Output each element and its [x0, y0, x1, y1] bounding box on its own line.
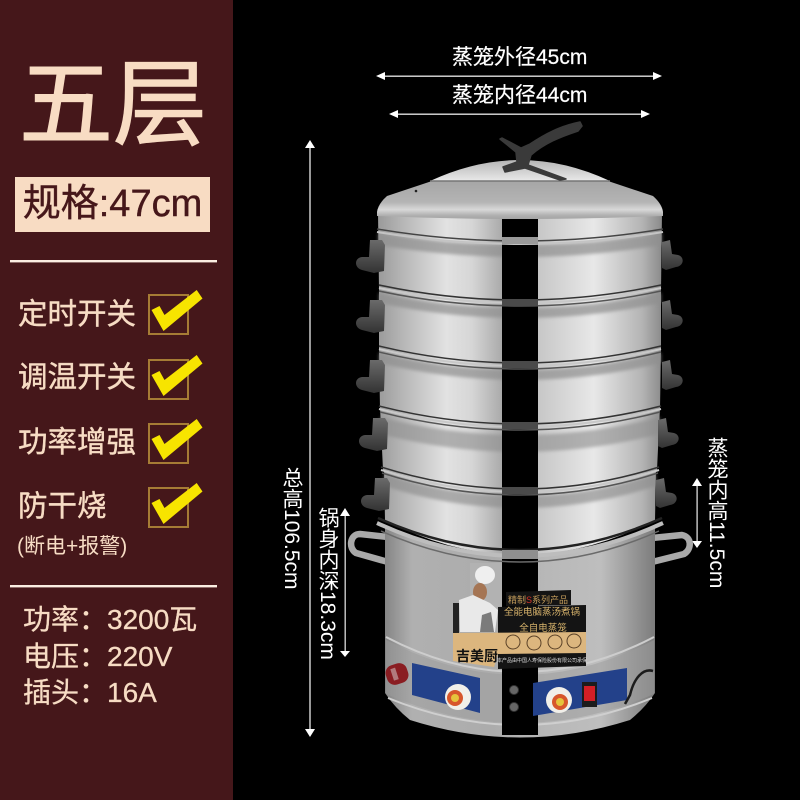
- icon: side handles left: [356, 240, 390, 511]
- tan brand band: [453, 632, 586, 667]
- steel sticker patch under label: [470, 563, 502, 613]
- dimension label: steamer inner diameter: 蒸笼内径44cm: [452, 84, 587, 107]
- panel: left blue control plate: [412, 663, 480, 713]
- insurance note: 本产品由中国人寿保险股份有限公司承保: [497, 657, 587, 664]
- icon: right dial: [546, 687, 572, 713]
- feature circles: [506, 634, 581, 650]
- spec: plug: 插头：16A: [23, 677, 157, 708]
- brand name: 吉美厨: [456, 648, 498, 664]
- illustration: electric steamer: [351, 122, 690, 738]
- steamer tier 3: [379, 348, 661, 427]
- arrow: steamer inner height: [692, 478, 702, 548]
- icon: indicator lights: [510, 686, 518, 712]
- panel: right blue control plate: [533, 668, 627, 716]
- lid: [377, 160, 663, 219]
- arrow: pot depth: [340, 508, 350, 657]
- divider lines: [10, 260, 217, 262]
- icon: pot side rings: [351, 534, 690, 562]
- product label sticker: [453, 566, 587, 669]
- label title: 全能电脑蒸汤煮锅: [504, 606, 580, 618]
- chef figure: [453, 566, 498, 633]
- icon: checkbox temperature: [149, 355, 202, 399]
- reflection stripe: [502, 219, 538, 735]
- rim lines: [377, 229, 663, 562]
- feature: timer switch: 定时开关: [18, 298, 136, 331]
- steamer tier 2: [379, 288, 661, 367]
- dimension label: total height: 总高106.5cm: [280, 467, 303, 590]
- dimension label: steamer outer diameter: 蒸笼外径45cm: [452, 46, 587, 69]
- icon: checkbox timer: [149, 290, 202, 334]
- spec: voltage: 电压：220V: [23, 641, 172, 672]
- steamer tier 1: [378, 212, 662, 305]
- dimension label: pot inner depth: 锅身内深18.3cm: [316, 507, 339, 660]
- label subtitle: 全自电蒸笼: [519, 622, 567, 634]
- feature: anti dry-burn: 防干烧: [18, 490, 107, 523]
- icon: red fuse knob: [383, 661, 411, 687]
- panel: left specification sidebar: [0, 0, 233, 800]
- feature note: power off and alarm: (断电+报警): [17, 535, 127, 558]
- icon: checkbox dry burn: [149, 483, 202, 527]
- rim segments across the black stripe: [502, 237, 538, 559]
- icon: checkbox power: [149, 419, 202, 463]
- icon: power cord: [625, 670, 653, 704]
- spec: power: 功率：3200瓦: [23, 604, 197, 635]
- icon: lid handle: [500, 122, 582, 180]
- heading: five layers: 五层: [19, 52, 207, 157]
- badge: size 47cm: 规格:47cm: [23, 183, 202, 225]
- black label blocks: [498, 590, 586, 669]
- steamer tier 4: [380, 407, 660, 492]
- arrow: inner diameter: [389, 110, 650, 118]
- dimension label: steamer inner height: 蒸笼内高11.5cm: [705, 437, 728, 588]
- icon: left dial: [445, 684, 471, 710]
- pot lower bands: [386, 637, 654, 725]
- arrow: total height: [305, 140, 315, 737]
- label texts: 精制S系列产品: [508, 594, 568, 605]
- icon: side handles right: [656, 240, 683, 508]
- pot body: [385, 525, 655, 738]
- arrow: outer diameter: [376, 72, 662, 80]
- feature: power boost: 功率增强: [18, 426, 136, 459]
- icon: red power switch: [582, 682, 597, 707]
- steamer tier 5: [384, 468, 656, 555]
- feature: temperature switch: 调温开关: [18, 361, 136, 394]
